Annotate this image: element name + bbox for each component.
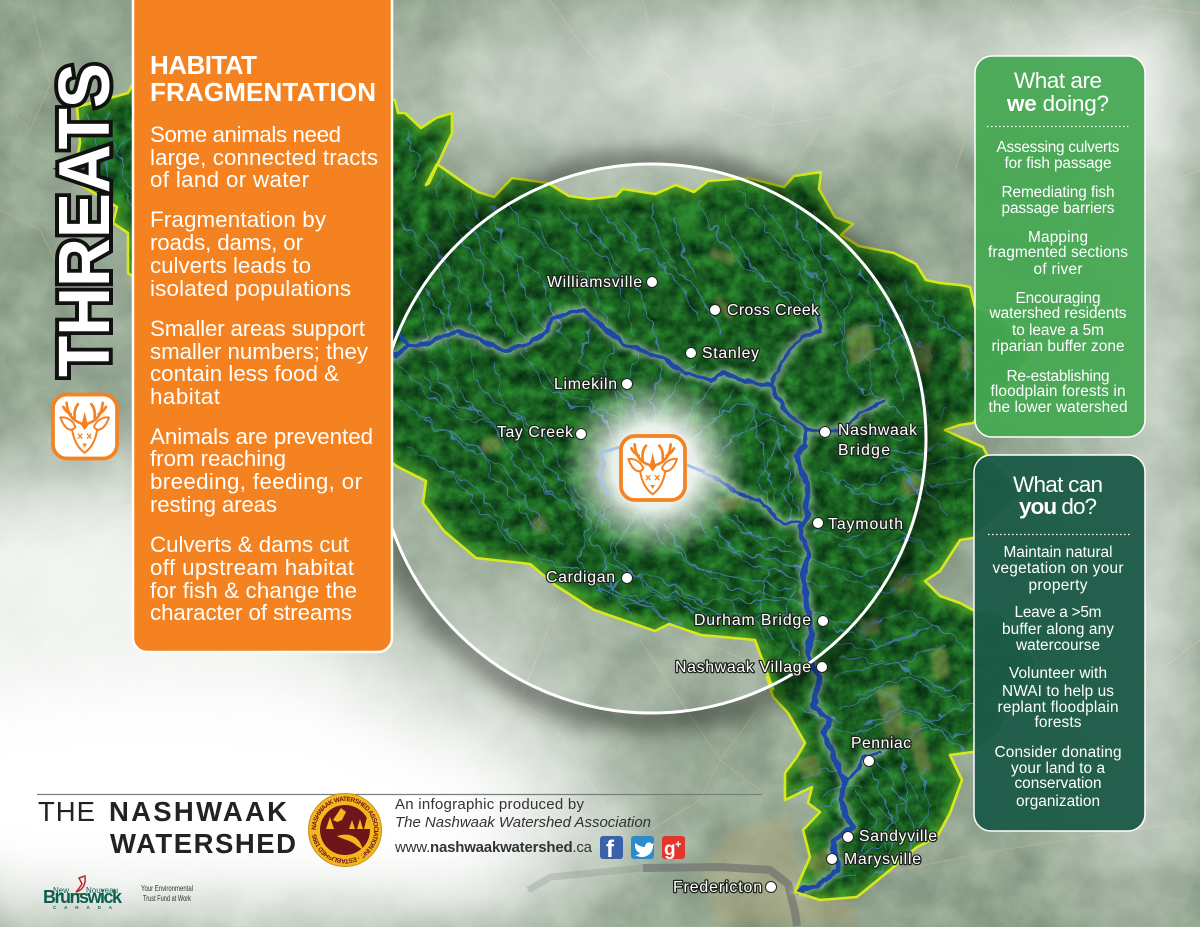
- actions list: Volunteer with: [1009, 665, 1107, 682]
- threat list: Some animals need: [150, 122, 341, 147]
- threat list: Culverts & dams cut: [150, 532, 350, 557]
- town markers and labels: Marysville: [844, 851, 921, 868]
- faded upstream river: [598, 446, 705, 496]
- icon: twitter: [631, 836, 654, 859]
- town markers and labels: Tay Creek: [497, 424, 573, 441]
- logo: New Brunswick Canada: New: [53, 886, 69, 895]
- threat list: [150, 122, 378, 625]
- actions list: organization: [1016, 793, 1100, 810]
- town markers and labels: Penniac: [851, 735, 911, 752]
- actions list: replant floodplain: [998, 699, 1118, 716]
- threat list: roads, dams, or: [150, 230, 304, 255]
- actions list: Assessing culverts: [996, 139, 1120, 156]
- Fredericton city and Saint John river: [528, 815, 860, 926]
- watershed boundary: [73, 80, 1037, 900]
- actions list: Remediating fish: [1002, 184, 1114, 201]
- panel heading: [150, 50, 376, 107]
- panel heading: FRAGMENTATION: [150, 77, 376, 107]
- watershed forest: [78, 88, 998, 899]
- panel: habitat fragmentation: [133, 0, 392, 652]
- town markers and labels: Cardigan: [546, 569, 615, 586]
- panel heading: [1006, 68, 1109, 116]
- actions list: floodplain forests in: [990, 383, 1126, 400]
- actions list: [988, 139, 1128, 416]
- footer title: The Nashwaak Watershed: THE: [38, 796, 95, 827]
- actions list: NWAI to help us: [1002, 683, 1114, 700]
- panel heading: we doing?: [1006, 91, 1109, 116]
- threat list: off upstream habitat: [150, 555, 355, 580]
- actions list: Encouraging: [1016, 290, 1100, 307]
- threat list: culverts leads to: [150, 253, 311, 278]
- vertical title: THREATS: THREATS: [45, 63, 125, 377]
- footer rule: [37, 794, 762, 796]
- Nashwaak main stem: [396, 310, 807, 446]
- logo: New Brunswick Canada: [43, 876, 123, 910]
- threat list: large, connected tracts: [150, 145, 378, 170]
- threat list: Smaller areas support: [150, 316, 366, 341]
- threat list: habitat: [150, 384, 221, 409]
- town markers and labels: Fredericton: [673, 879, 762, 896]
- town markers and labels: Durham Bridge: [694, 612, 811, 629]
- panel: what can you do: [974, 455, 1145, 831]
- actions list: Leave a >5m: [1014, 604, 1102, 621]
- town markers and labels: Nashwaak Village: [675, 659, 811, 676]
- town markers and labels: Limekiln: [554, 376, 617, 393]
- town markers and labels: Cross Creek: [727, 302, 819, 319]
- tagline: trust fund: Trust Fund at Work: [143, 894, 192, 903]
- main rivers: [396, 310, 884, 892]
- town markers and labels: [497, 274, 937, 896]
- icon: google plus: [662, 836, 685, 860]
- icon: facebook: f: [606, 836, 615, 863]
- tagline: trust fund: Your Environmental: [141, 884, 193, 893]
- actions list: buffer along any: [1002, 621, 1114, 638]
- tagline: trust fund: [141, 884, 193, 903]
- icon: google plus: +: [675, 839, 681, 851]
- actions list: passage barriers: [1002, 200, 1115, 217]
- credit text: An infographic produced by: [395, 796, 584, 813]
- actions list: your land to a: [1011, 760, 1105, 777]
- icon: google plus: g: [664, 839, 676, 860]
- panel: what are we doing: [975, 56, 1145, 437]
- tributary streams: [85, 110, 1024, 901]
- town markers and labels: Nashwaak: [838, 422, 917, 439]
- threat list: isolated populations: [150, 276, 351, 301]
- actions list: Maintain natural: [1004, 544, 1112, 561]
- footer title: The Nashwaak Watershed: WATERSHED: [110, 828, 296, 859]
- lens circle outline: [377, 164, 926, 713]
- actions list: Mapping: [1028, 229, 1088, 246]
- threat list: from reaching: [150, 446, 286, 471]
- panel heading: What can: [1013, 472, 1103, 497]
- threat list: smaller numbers; they: [150, 339, 369, 364]
- actions list: Re-establishing: [1006, 368, 1110, 385]
- icon: facebook: [600, 836, 623, 863]
- threat list: for fish & change the: [150, 578, 357, 603]
- panel heading: [1013, 472, 1103, 519]
- footer title: The Nashwaak Watershed: [38, 796, 296, 859]
- town markers and labels: Sandyville: [859, 828, 937, 845]
- credit text: [394, 796, 651, 856]
- threat list: Fragmentation by: [150, 207, 327, 232]
- actions list: for fish passage: [1004, 155, 1112, 172]
- inner light disc of lens: [378, 164, 926, 712]
- town markers and labels: Stanley: [702, 345, 759, 362]
- lens shadow: [374, 163, 930, 719]
- actions list: Consider donating: [994, 744, 1122, 761]
- logo: New Brunswick Canada: Nouveau: [86, 886, 118, 895]
- panel heading: you do?: [1019, 494, 1097, 519]
- actions list: to leave a 5m: [1012, 322, 1104, 339]
- threat list: Animals are prevented: [150, 424, 373, 449]
- credit text: www.nashwaakwatershed.ca: [394, 839, 593, 856]
- town markers and labels: Taymouth: [828, 516, 903, 533]
- threat list: resting areas: [150, 492, 277, 517]
- threat list: of land or water: [150, 167, 310, 192]
- threat list: character of streams: [150, 600, 352, 625]
- glow behind central icon: [562, 375, 746, 559]
- icon: central deer with x eyes: [621, 436, 685, 500]
- logo: New Brunswick Canada: Brunswick: [43, 887, 123, 907]
- actions list: watercourse: [1015, 637, 1100, 654]
- actions list: fragmented sections: [988, 244, 1128, 261]
- actions list: watershed residents: [988, 305, 1127, 322]
- footer title: The Nashwaak Watershed: NASHWAAK: [109, 796, 287, 827]
- threat list: contain less food &: [150, 361, 339, 386]
- actions list: vegetation on your: [992, 560, 1124, 577]
- association seal: NASHWAAK WATERSHED ASSOCIATION INC. · ESTABLISHED 1995: [312, 796, 378, 864]
- river glow: [396, 310, 884, 892]
- threat list: breeding, feeding, or: [150, 469, 363, 494]
- logo: New Brunswick Canada: CANADA: [53, 905, 113, 910]
- actions list: [992, 544, 1124, 810]
- clearings: [480, 247, 972, 878]
- actions list: conservation: [1014, 775, 1102, 792]
- actions list: riparian buffer zone: [992, 338, 1124, 355]
- town markers and labels: Williamsville: [547, 274, 642, 291]
- panel heading: What are: [1014, 68, 1102, 93]
- actions list: of river: [1034, 261, 1082, 278]
- icon: threats deer badge: [53, 394, 117, 458]
- actions list: the lower watershed: [988, 399, 1128, 416]
- town markers and labels: Bridge: [838, 442, 890, 459]
- credit text: The Nashwaak Watershed Association: [395, 814, 651, 831]
- actions list: property: [1028, 577, 1088, 594]
- panel heading: HABITAT: [150, 50, 257, 80]
- actions list: forests: [1034, 714, 1082, 731]
